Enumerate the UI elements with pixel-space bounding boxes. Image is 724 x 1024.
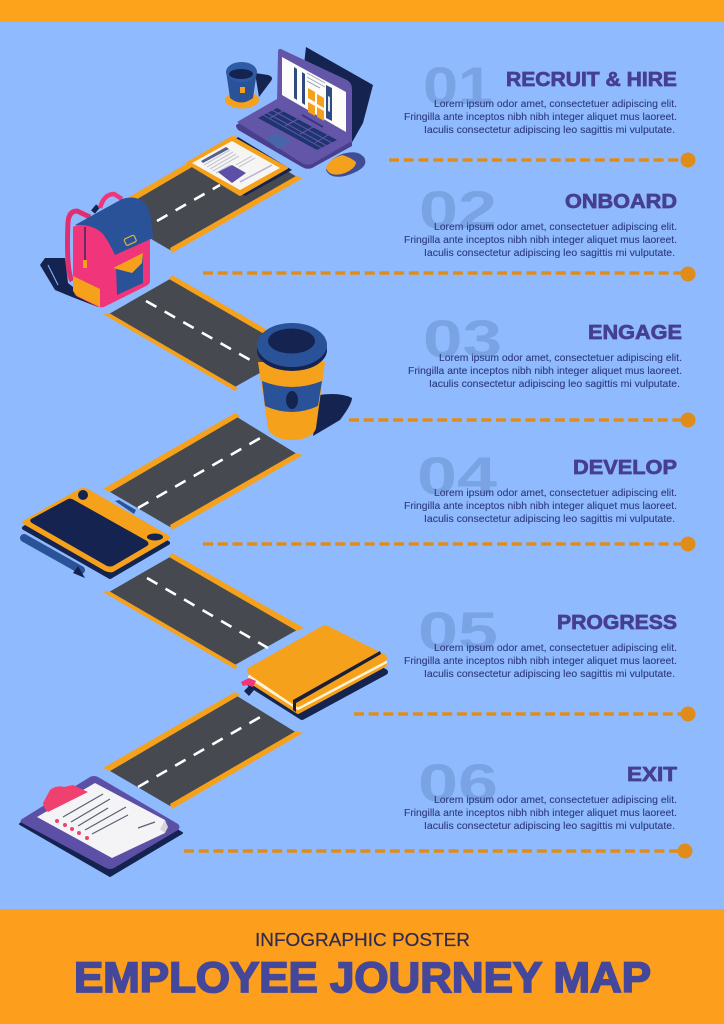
top band [0,0,724,22]
step 6: exit: Fringilla ante inceptos nibh nibh integer aliquet mus laoreet. [404,807,677,819]
step 4: develop: 04 [417,447,498,506]
step 2: onboard: 02 [419,181,497,240]
step 5: progress: Lorem ipsum odor amet, consectetuer adipiscing elit. [434,642,677,654]
step 6: exit [184,754,692,858]
road segment 3 [103,413,303,530]
step 1: recruit and hire: 01 [423,57,493,116]
step 2: onboard [203,181,696,282]
road segment 1 [103,136,303,253]
step 2: onboard: Iaculis consectetur adipiscing leo sagittis mi vulputate. [424,247,675,259]
step 2: onboard: Lorem ipsum odor amet, consectetuer adipiscing elit. [434,221,677,233]
step 1: recruit and hire: Iaculis consectetur adipiscing leo sagittis mi vulputate. [424,124,675,136]
icon: tablet document [187,137,292,196]
step 3: engage: Fringilla ante inceptos nibh nibh integer aliquet mus laoreet. [408,365,682,377]
step 6: exit: 06 [418,754,498,813]
road segment 5 [103,692,303,809]
step 5: progress [354,602,696,722]
icon: clipboard [20,776,182,876]
icon: coffee mug [225,62,272,108]
step 4: develop: Iaculis consectetur adipiscing leo sagittis mi vulputate. [424,513,675,525]
road segment 2 [103,275,304,391]
step 1: recruit and hire: Fringilla ante inceptos nibh nibh integer aliquet mus laoreet. [404,111,677,123]
step 3: engage: 03 [423,310,502,369]
footer band with title: INFOGRAPHIC POSTER [255,930,470,950]
icon: backpack [40,194,153,307]
icon: notebook [241,629,385,717]
step 6: exit: Iaculis consectetur adipiscing leo sagittis mi vulputate. [424,820,675,832]
step 5: progress: PROGRESS [557,612,677,634]
step 4: develop: Lorem ipsum odor amet, consectetuer adipiscing elit. [434,487,677,499]
step 3: engage: Lorem ipsum odor amet, consectetuer adipiscing elit. [439,352,682,364]
step 1: recruit and hire: RECRUIT & HIRE [506,69,677,91]
step 2: onboard: ONBOARD [565,191,677,213]
icon: graphics tablet and pen [22,488,170,578]
road segment 4 [103,553,304,669]
step 5: progress: Fringilla ante inceptos nibh nibh integer aliquet mus laoreet. [404,655,677,667]
step 3: engage [349,310,696,428]
step 2: onboard: Fringilla ante inceptos nibh nibh integer aliquet mus laoreet. [404,234,677,246]
step 4: develop: Fringilla ante inceptos nibh nibh integer aliquet mus laoreet. [404,500,677,512]
footer band with title [0,909,724,1024]
icon: laptop [236,47,373,169]
icon: takeaway coffee cup [257,323,352,440]
step 1: recruit and hire [389,57,696,168]
step 5: progress: Iaculis consectetur adipiscing leo sagittis mi vulputate. [424,668,675,680]
step 1: recruit and hire: Lorem ipsum odor amet, consectetuer adipiscing elit. [434,98,677,110]
step 5: progress: 05 [418,602,498,661]
step 3: engage: Iaculis consectetur adipiscing leo sagittis mi vulputate. [429,378,680,390]
step 3: engage: ENGAGE [588,322,682,344]
step 6: exit: Lorem ipsum odor amet, consectetuer adipiscing elit. [434,794,677,806]
footer band with title: EMPLOYEE JOURNEY MAP [74,954,651,1002]
step 4: develop [203,447,696,552]
step 4: develop: DEVELOP [573,457,677,479]
icon: computer mouse [326,152,365,177]
step 6: exit: EXIT [627,764,677,786]
